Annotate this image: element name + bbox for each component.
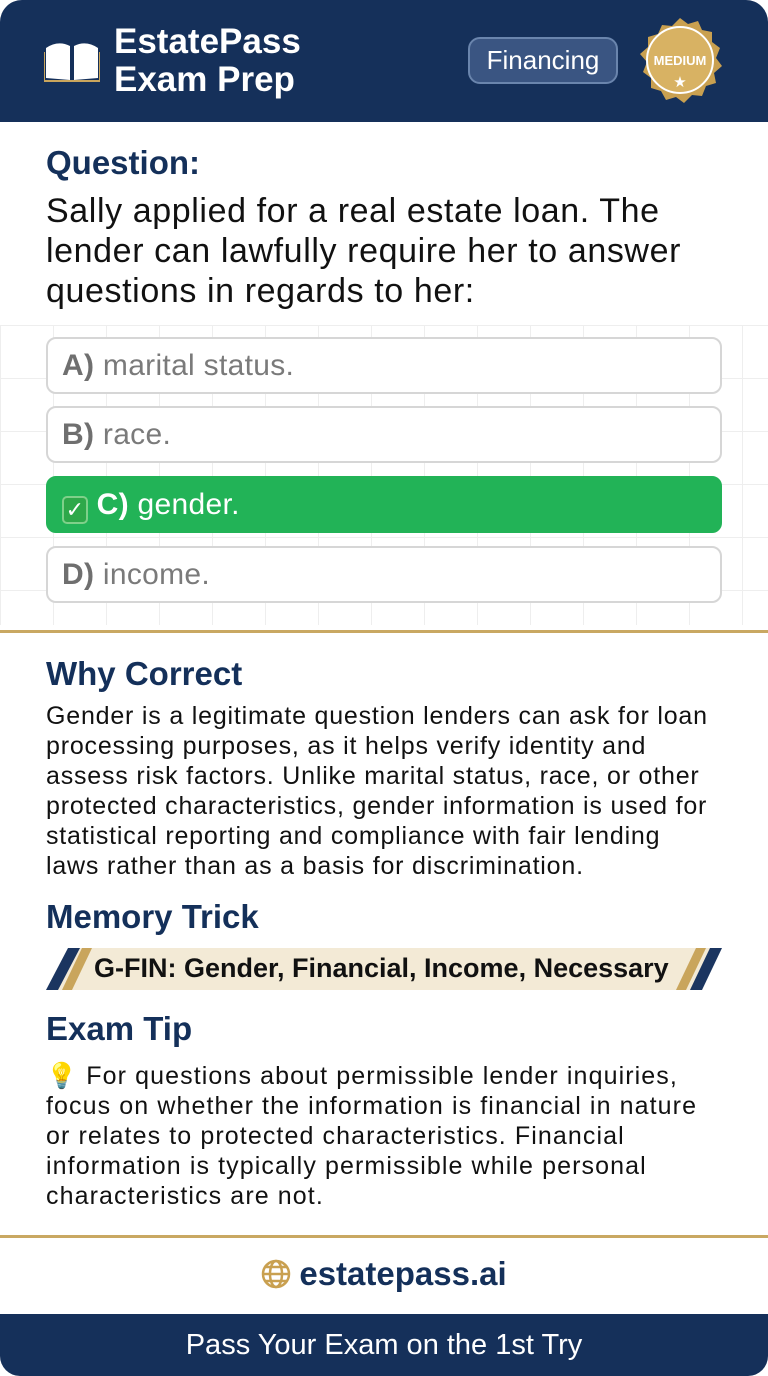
badge: medium — [640, 18, 722, 103]
exam tip text: or relates to protected characteristics. Financial — [46, 1122, 625, 1150]
exam tip text: focus on whether the information is financial in nature — [46, 1092, 697, 1120]
exam tip text: characteristics are not. — [46, 1182, 324, 1210]
question text — [46, 192, 681, 310]
option B — [46, 406, 722, 463]
why correct text: protected characteristics, gender information is used for — [46, 792, 707, 820]
why correct text: laws rather than as a basis for discrimination. — [46, 852, 584, 880]
question text: lender can lawfully require her to answer — [46, 232, 681, 270]
why correct text: Gender is a legitimate question lenders can ask for loan — [46, 702, 708, 730]
exam tip text — [46, 1062, 697, 1210]
why correct text: assess risk factors. Unlike marital status, race, or other — [46, 762, 700, 790]
divider gold — [0, 630, 768, 633]
exam tip text: 💡 For questions about permissible lender inquiries, — [46, 1062, 678, 1090]
question text: Sally applied for a real estate loan. The — [46, 192, 660, 230]
option C correct — [46, 476, 722, 533]
icon: book — [44, 43, 100, 82]
memory banner: G-FIN: Gender, Financial, Income, Necessary — [94, 953, 669, 983]
why correct text: statistical reporting and compliance with fair lending — [46, 822, 660, 850]
why correct heading: Why Correct — [46, 655, 242, 692]
grid background — [0, 325, 768, 625]
question heading: Question: — [46, 144, 200, 181]
why correct text: processing purposes, as it helps verify identity and — [46, 732, 646, 760]
exam tip text: information is typically permissible while personal — [46, 1152, 647, 1180]
website: estatepass.ai — [299, 1255, 507, 1292]
question text: questions in regards to her: — [46, 272, 475, 310]
memory trick heading: Memory Trick — [46, 898, 259, 935]
tag: Financing: Financing — [487, 45, 599, 75]
option D — [46, 546, 722, 603]
tag: Financing — [468, 37, 618, 84]
footer: Pass Your Exam on the 1st Try — [186, 1329, 582, 1361]
option D: D) income. — [62, 558, 210, 591]
logo text: Exam Prep — [114, 60, 295, 99]
divider gold — [0, 1235, 768, 1238]
header — [0, 0, 768, 122]
exam tip heading: Exam Tip — [46, 1010, 192, 1047]
option A: A) marital status. — [62, 349, 294, 382]
option B: B) race. — [62, 418, 171, 451]
option C correct: ✓ — [66, 497, 84, 522]
memory banner — [46, 948, 722, 990]
option C correct: C) gender. — [97, 488, 240, 521]
option A — [46, 337, 722, 394]
footer — [0, 1314, 768, 1376]
logo text — [114, 22, 301, 99]
logo text: EstatePass — [114, 22, 301, 61]
badge: medium: ★ — [673, 74, 687, 91]
why correct text — [46, 702, 708, 880]
badge: medium: MEDIUM — [654, 53, 706, 68]
